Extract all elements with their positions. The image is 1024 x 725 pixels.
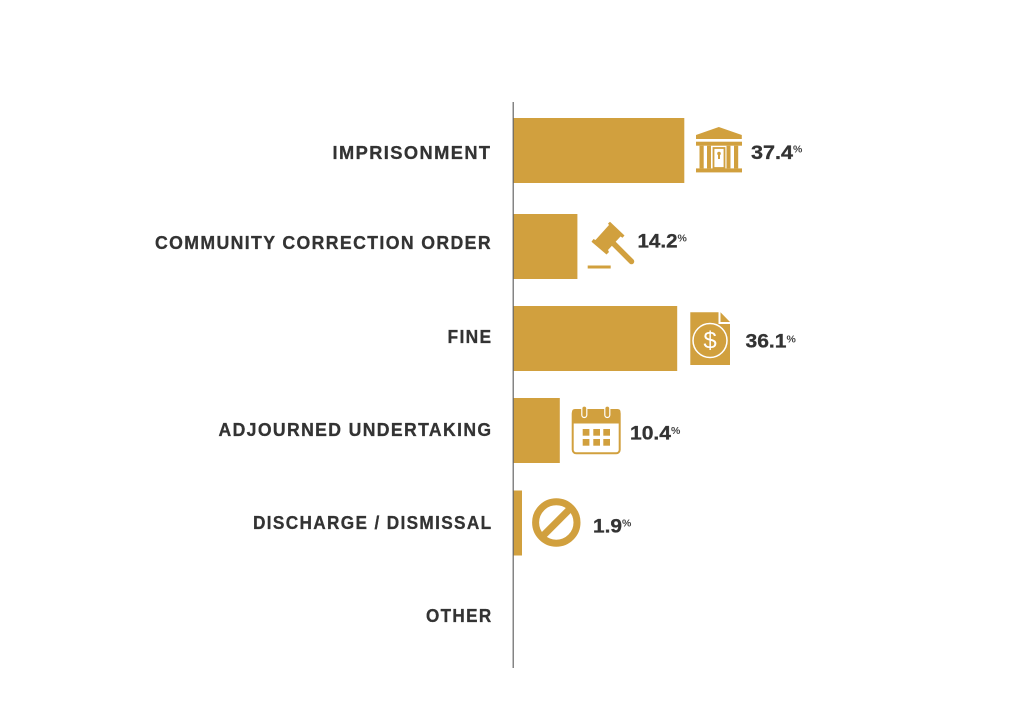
bar: imprisonment [513,118,684,183]
percent sign: 14.2%: % [678,233,688,245]
label: other: OTHER [426,606,492,626]
label: discharge / dismissal: DISCHARGE / DISMISSAL [253,513,492,533]
value: 14.2%: 14.2 [638,232,678,252]
row: community correction order [155,214,688,279]
row: adjourned undertaking [218,398,681,463]
percent sign: 36.1%: % [786,334,796,346]
icon: dollar document: $ [703,328,717,354]
row: fine [448,306,796,371]
value: 37.4%: 37.4 [751,143,793,164]
icon: prohibited sign [536,502,577,543]
icon: gavel [588,222,632,268]
value: 1.9%: 1.9 [593,516,622,538]
icon: courthouse prison [696,127,742,172]
row: discharge / dismissal [253,490,632,556]
label: imprisonment: IMPRISONMENT [332,143,492,163]
percent sign: 10.4%: % [671,425,681,437]
label: community correction order: COMMUNITY CORRECTION ORDER [155,233,492,253]
row: imprisonment [332,118,803,183]
bar: fine [513,306,677,371]
value: 10.4%: 10.4 [630,424,671,444]
bar: adjourned undertaking [513,398,560,463]
bar: discharge / dismissal [513,490,522,556]
bar: community correction order [513,214,577,279]
percent sign: 1.9%: % [622,518,632,530]
icon: dollar document [690,312,730,365]
value: 36.1%: 36.1 [746,332,787,352]
label: fine: FINE [448,327,492,347]
icon: calendar [572,406,620,453]
label: adjourned undertaking: ADJOURNED UNDERTAKING [218,420,492,440]
percent sign: 37.4%: % [793,144,803,156]
